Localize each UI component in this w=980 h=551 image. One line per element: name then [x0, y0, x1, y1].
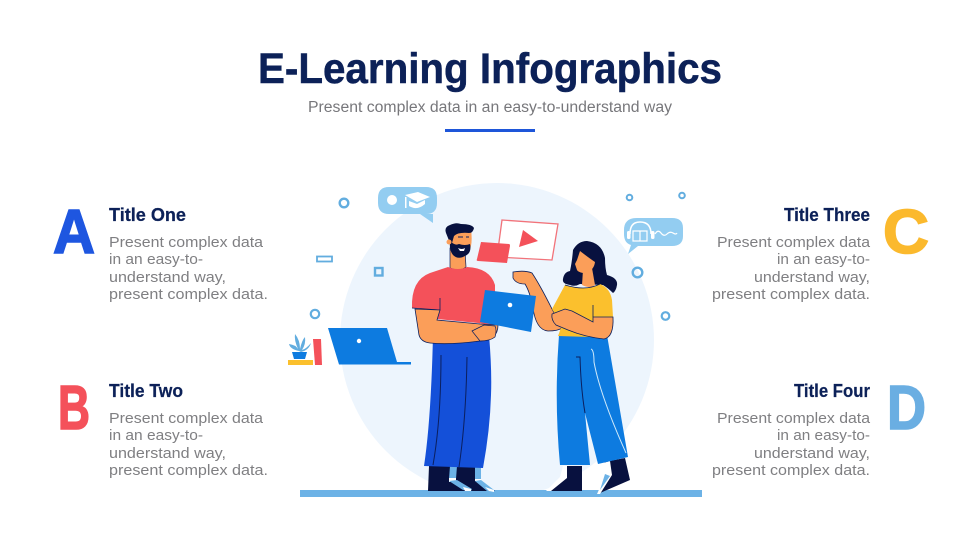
- text: title four body: in an easy-to-: [777, 428, 870, 444]
- text: title three body: in an easy-to-: [777, 252, 870, 268]
- man hand on tablet: [472, 325, 496, 341]
- letter C: C: [883, 198, 929, 267]
- text: title one body: present complex data.: [109, 287, 268, 303]
- text: title four body: Present complex data: [717, 411, 871, 427]
- man trousers: [424, 335, 491, 468]
- heading: title three: Title Three: [784, 204, 870, 225]
- text: title four body: understand way,: [754, 446, 870, 462]
- title underline: [445, 129, 535, 132]
- woman neck: [582, 268, 595, 287]
- man hair: [446, 223, 474, 243]
- illustration: two people e-learning: [288, 183, 702, 497]
- text: title two body: understand way,: [109, 446, 226, 462]
- text: title four body: present complex data.: [712, 463, 870, 479]
- laptop with plant and book: [288, 328, 411, 365]
- woman: [513, 241, 630, 494]
- text: title two body: Present complex data: [109, 411, 264, 427]
- woman front arm: [552, 309, 613, 339]
- heading: title one: Title One: [109, 204, 186, 225]
- text: title three body: understand way,: [754, 270, 870, 286]
- floor line: [300, 490, 702, 497]
- block D: title four: [712, 374, 926, 479]
- woman face: [575, 251, 595, 273]
- man shoes: [428, 466, 495, 491]
- man shirt: [412, 267, 495, 326]
- man arm: [415, 309, 498, 344]
- block C: title three: [712, 198, 929, 303]
- block A: title one: [53, 198, 268, 303]
- woman trousers: [557, 335, 628, 465]
- video player card: [477, 220, 558, 263]
- speech bubble: audio book: [624, 218, 683, 254]
- block B: title two: [58, 374, 268, 479]
- title: E-Learning Infographics: [258, 45, 722, 93]
- letter D: D: [887, 374, 926, 443]
- man: [412, 223, 498, 492]
- heading: title two: Title Two: [109, 380, 183, 401]
- woman hair: [563, 241, 617, 293]
- text: title two body: present complex data.: [109, 463, 268, 479]
- heading: title four: Title Four: [794, 380, 870, 401]
- text: title one body: in an easy-to-: [109, 252, 203, 268]
- woman top: [552, 284, 613, 337]
- text: title two body: in an easy-to-: [109, 428, 203, 444]
- letter B: B: [58, 374, 90, 443]
- subtitle: Present complex data in an easy-to-understand way: [308, 99, 672, 116]
- man beard: [450, 241, 470, 258]
- man neck: [450, 248, 466, 270]
- letter A: A: [53, 198, 95, 267]
- text: title three body: Present complex data: [717, 235, 871, 251]
- text: title one body: Present complex data: [109, 235, 264, 251]
- tablet: [472, 290, 536, 341]
- background circle: [340, 183, 654, 497]
- text: title three body: present complex data.: [712, 287, 870, 303]
- decorative rings and squares: [311, 193, 685, 320]
- text: title one body: understand way,: [109, 270, 226, 286]
- man face: [450, 229, 472, 257]
- woman raised arm: [513, 271, 562, 331]
- speech bubble: graduation cap: [378, 187, 437, 223]
- woman shoes: [547, 466, 582, 491]
